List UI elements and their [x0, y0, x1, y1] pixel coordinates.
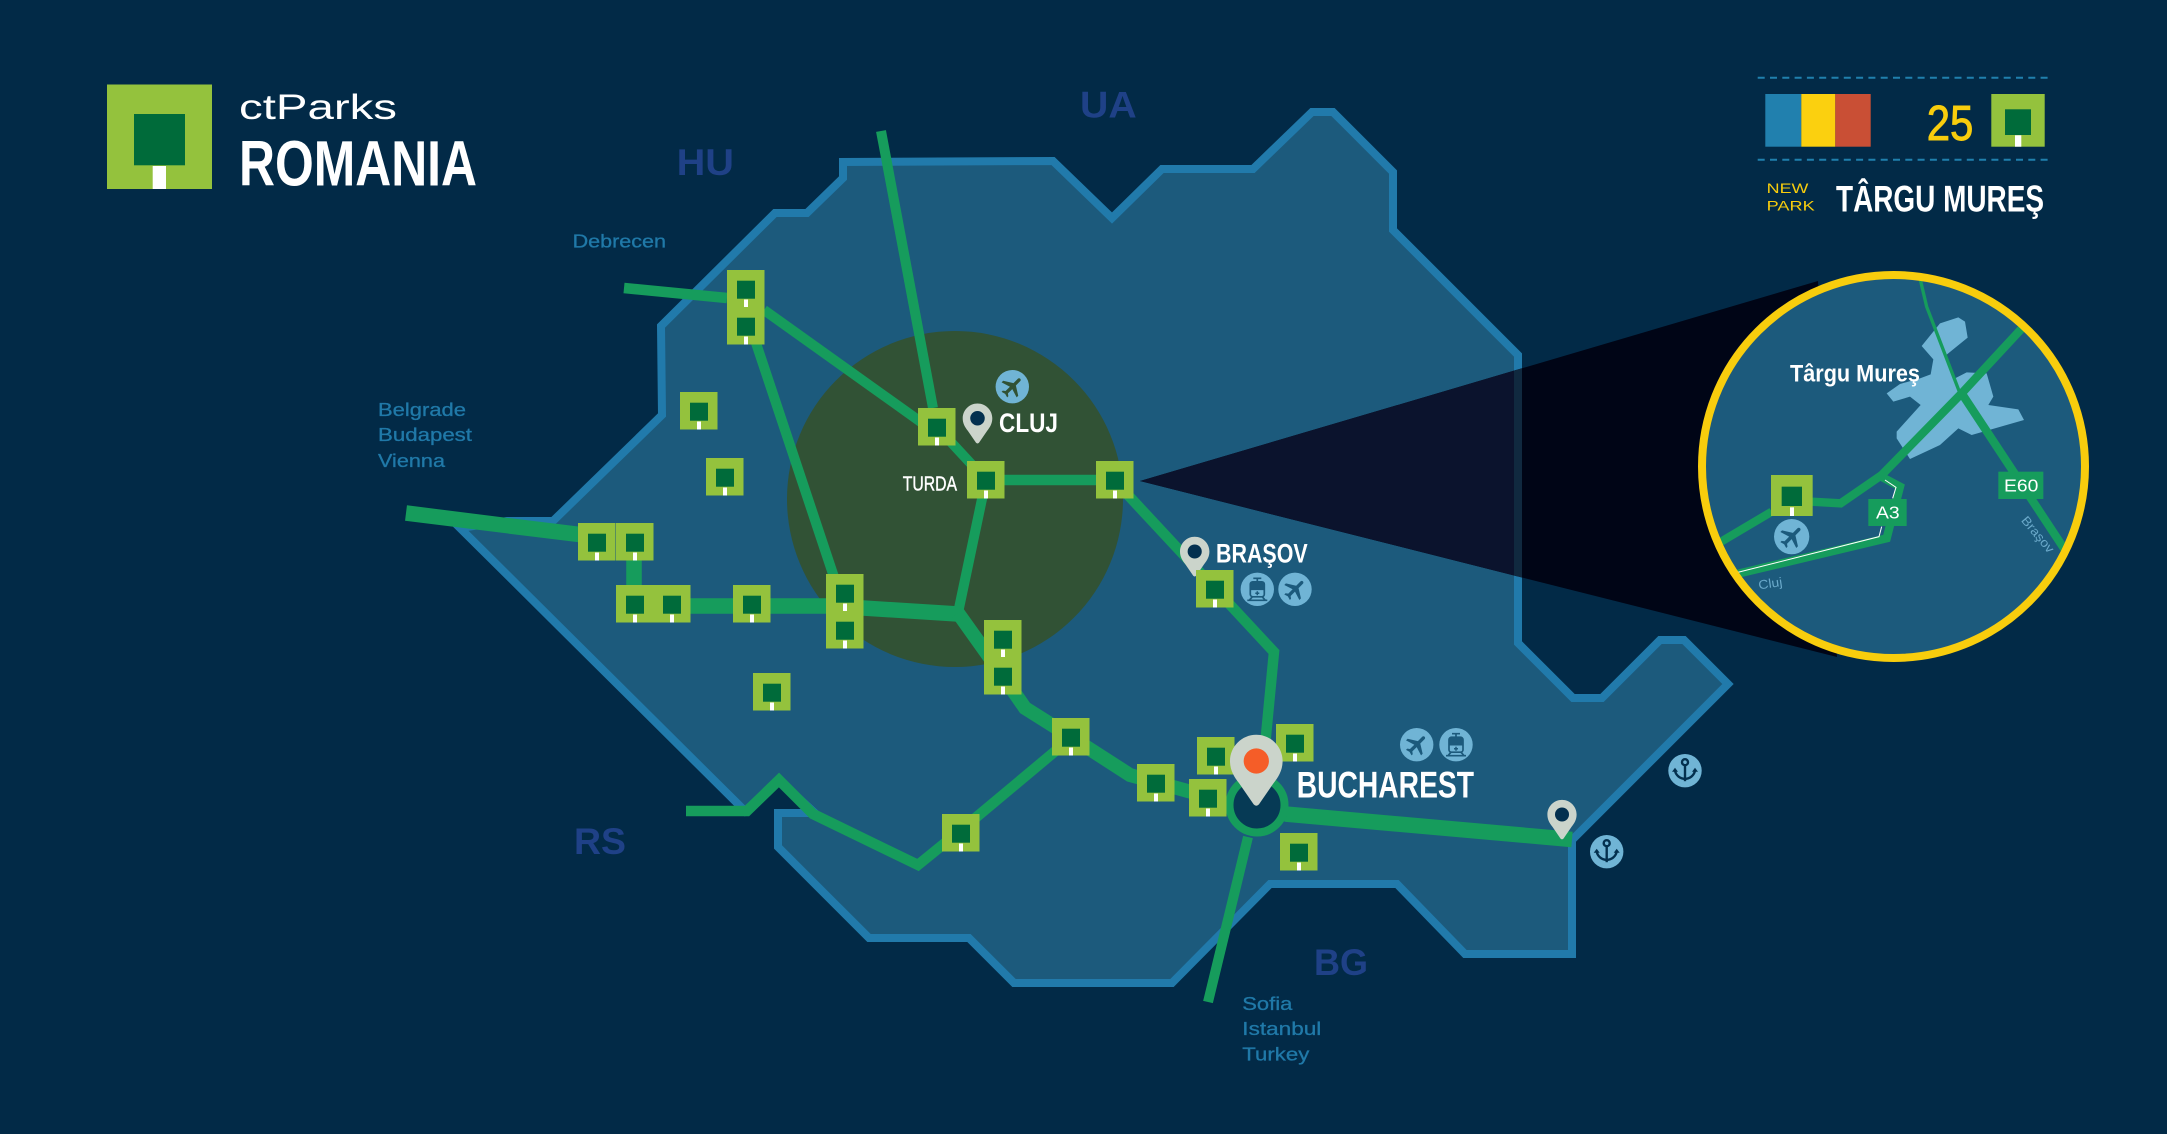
- icon: Bucharest airport: [1400, 728, 1433, 761]
- sign: A3: A3: [1876, 503, 1900, 523]
- road: junction to Turda: [958, 480, 986, 613]
- new park label: [1767, 180, 1816, 214]
- country label: HU: HU: [677, 142, 734, 183]
- road: north-west to south: [755, 340, 835, 580]
- country label: UA: UA: [1080, 85, 1137, 126]
- destinations: Belgrade, Budapest, Vienna: Budapest: [378, 424, 472, 445]
- inset labels and markers: [1757, 361, 2057, 592]
- road: Debrecen: [624, 288, 727, 298]
- city area: [1887, 317, 2024, 459]
- heading: ctParks: ctParks: [239, 88, 397, 127]
- destinations: Sofia, Istanbul, Turkey: Turkey: [1242, 1044, 1310, 1065]
- sign: E60: E60: [2004, 476, 2038, 496]
- park count: 25: [1927, 97, 1973, 151]
- sign: A3: [1868, 499, 1907, 526]
- Romanian flag: [1765, 94, 1871, 147]
- label: BRASOV: BRAŞOV: [1216, 539, 1308, 569]
- destination: Debrecen: Debrecen: [573, 232, 666, 252]
- icon: Brasov airport: [1278, 573, 1312, 606]
- destinations: Sofia, Istanbul, Turkey: [1242, 993, 1321, 1065]
- icon: Cluj airport: [996, 370, 1029, 403]
- pin: Brasov: [1180, 537, 1209, 576]
- park icon: [1991, 94, 2045, 147]
- road: to Brasov and Bucharest: [1114, 480, 1274, 746]
- road: north-west to Cluj: [764, 310, 925, 425]
- label: CLUJ: CLUJ: [999, 408, 1058, 438]
- infographic canvas: [107, 76, 2089, 1065]
- road: Turda to Cluj: [937, 427, 986, 480]
- new park label: PARK: [1767, 198, 1816, 214]
- destinations: Belgrade, Budapest, Vienna: [378, 399, 472, 471]
- label: TURDA: TURDA: [903, 473, 957, 496]
- icon: anchor south: [1590, 835, 1623, 868]
- road: Constanta: [1285, 814, 1572, 840]
- inset contents: [1718, 278, 2065, 574]
- Cluj region highlight: [787, 331, 1123, 667]
- pin: Cluj: [963, 404, 992, 443]
- inset disc: [1702, 275, 2085, 658]
- destinations: Belgrade, Budapest, Vienna: Vienna: [378, 450, 446, 471]
- new park name: TÂRGU MUREŞ: [1836, 178, 2044, 220]
- road: connector: [626, 540, 642, 600]
- inset roads: [1718, 278, 2065, 574]
- panel: new park counter: [1758, 78, 2051, 220]
- road label: Brasov: Braşov: [2018, 514, 2057, 556]
- road: north: [881, 131, 933, 408]
- destinations: Sofia, Istanbul, Turkey: Sofia: [1242, 993, 1293, 1014]
- road: west corridor: [650, 606, 958, 614]
- dashed rule bottom: [1758, 159, 2051, 161]
- spotlight beam to inset: [1140, 281, 1837, 657]
- icon: anchor north: [1668, 754, 1702, 787]
- airport icon: [1774, 519, 1809, 554]
- road: Sofia: [1208, 837, 1248, 1002]
- panel: Targu Mures inset map: [1702, 275, 2085, 658]
- pin: Bucharest: [1230, 735, 1283, 806]
- icon: Bucharest train: [1439, 728, 1473, 761]
- sign: E60: [1998, 472, 2043, 499]
- road network: [406, 131, 1572, 1002]
- road label: Cluj: Cluj: [1757, 575, 1783, 592]
- city label: Târgu Mureş: [1790, 361, 1920, 388]
- destinations: Belgrade, Budapest, Vienna: Belgrade: [378, 399, 466, 420]
- road: south loop: [686, 738, 1071, 865]
- park: Brasov: [1196, 570, 1234, 608]
- destinations: Sofia, Istanbul, Turkey: Istanbul: [1242, 1018, 1321, 1039]
- map of Romania: [460, 112, 1728, 983]
- park marker: [1771, 475, 1813, 516]
- A3 centre line: [1737, 480, 1896, 573]
- icon: Brasov train: [1241, 573, 1274, 606]
- pin: Constanta: [1547, 800, 1577, 839]
- inset ring: [1702, 275, 2085, 658]
- road: Belgrade: [406, 513, 600, 537]
- Bucharest ring: [1230, 778, 1284, 832]
- industrial parks (25 markers): [578, 270, 1318, 870]
- dashed rule top: [1758, 77, 2051, 79]
- new park label: NEW: [1767, 180, 1809, 196]
- road: Turda east: [986, 475, 1114, 485]
- road: south-east corridor: [958, 613, 1195, 793]
- label: BUCHAREST: BUCHAREST: [1297, 765, 1474, 806]
- country label: BG: BG: [1314, 942, 1368, 983]
- logo: ctParks tree mark: [107, 84, 212, 189]
- country label: RS: RS: [574, 821, 626, 862]
- heading: ROMANIA: ROMANIA: [239, 128, 477, 200]
